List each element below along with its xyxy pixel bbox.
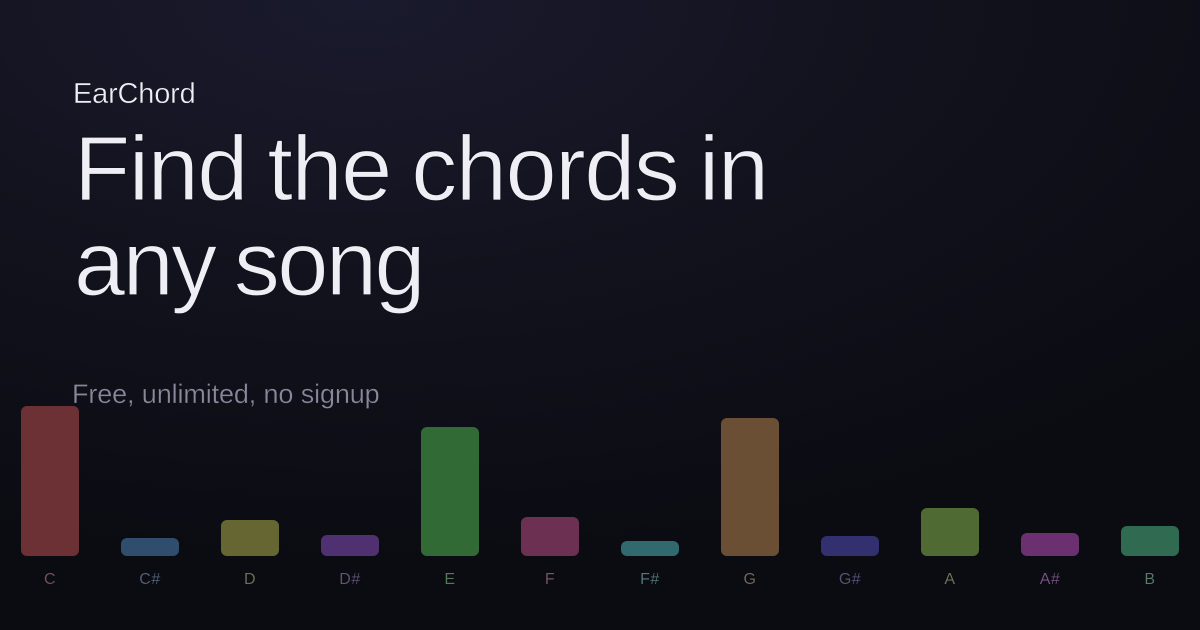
brand name: EarChord: [73, 78, 196, 110]
label A#: A#: [1040, 571, 1060, 588]
bar D#: [321, 535, 379, 556]
label E: E: [444, 571, 456, 588]
bar A: [921, 508, 979, 556]
label G#: G#: [839, 571, 861, 588]
bar E: [421, 427, 479, 556]
label D: D: [244, 571, 256, 588]
bar A#: [1021, 533, 1079, 556]
bar C: [21, 406, 79, 556]
label C: C: [44, 571, 56, 588]
label G: G: [744, 571, 756, 588]
main heading: any song: [74, 213, 423, 315]
label B: B: [1144, 571, 1156, 588]
bar chart: pitch classes: [21, 406, 1179, 588]
tagline: Free, unlimited, no signup: [72, 379, 380, 409]
main heading: [74, 118, 767, 315]
bar C#: [121, 538, 179, 556]
bar D: [221, 520, 279, 556]
label F#: F#: [640, 571, 660, 588]
bar G#: [821, 536, 879, 556]
label D#: D#: [339, 571, 361, 588]
bar B: [1121, 526, 1179, 556]
label A: A: [944, 571, 956, 588]
main heading: Find the chords in: [74, 118, 767, 220]
bar F: [521, 517, 579, 556]
bar F#: [621, 541, 679, 556]
label C#: C#: [139, 571, 161, 588]
bar G: [721, 418, 779, 556]
label F: F: [545, 571, 555, 588]
